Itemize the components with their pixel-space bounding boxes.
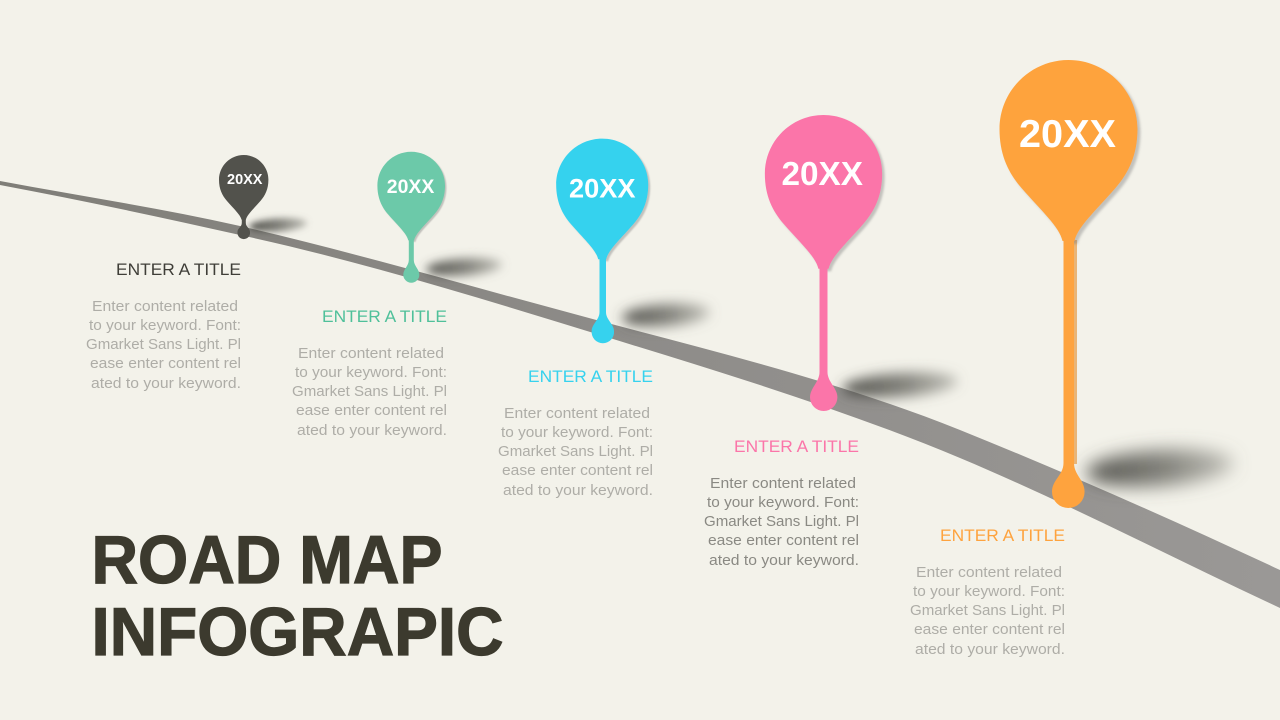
- title: [92, 522, 504, 670]
- block 3 body: ease enter content rel: [502, 462, 653, 479]
- block 3 heading: ENTER A TITLE: [528, 367, 653, 386]
- pin 1 head: [219, 155, 268, 220]
- text block 1: [86, 260, 241, 392]
- text block 2: [292, 307, 447, 439]
- block 3 body: Enter content related: [504, 405, 650, 422]
- pin 4 stem and foot: [810, 262, 837, 411]
- block 5 body: ated to your keyword.: [915, 641, 1065, 658]
- block 4 body: Gmarket Sans Light. Pl: [704, 513, 859, 530]
- block 4 body: Enter content related: [710, 475, 856, 492]
- pin 2 year: 20XX: [387, 177, 435, 198]
- block 2 body: to your keyword. Font:: [295, 364, 447, 381]
- pin 5 head: [1000, 60, 1138, 241]
- pin 2: [377, 152, 503, 283]
- block 1 body: to your keyword. Font:: [89, 317, 241, 334]
- pin 1: [219, 155, 307, 239]
- pin 3 ground shadow: [621, 301, 711, 329]
- pin 4 year: 20XX: [782, 155, 863, 192]
- road: [0, 181, 1280, 608]
- block 4 body: [704, 475, 859, 569]
- pin 3 head: [556, 139, 648, 259]
- block 1 body: Enter content related: [92, 298, 238, 315]
- block 1 body: ated to your keyword.: [91, 375, 241, 392]
- block 3 body: Gmarket Sans Light. Pl: [498, 443, 653, 460]
- pin 3 stem and foot: [592, 255, 614, 343]
- block 1 body: ease enter content rel: [90, 355, 241, 372]
- title: INFOGRAPIC: [92, 594, 504, 670]
- block 5 heading: ENTER A TITLE: [940, 526, 1065, 545]
- text block 3: [498, 367, 653, 499]
- pin 5: [1000, 60, 1235, 508]
- block 1 body: Gmarket Sans Light. Pl: [86, 336, 241, 353]
- block 2 body: ease enter content rel: [296, 402, 447, 419]
- pin 4 ground shadow: [841, 369, 959, 401]
- pin 4 head: [765, 115, 882, 269]
- title: ROAD MAP: [92, 522, 442, 598]
- text block 4: [704, 437, 859, 569]
- block 2 body: [292, 345, 447, 439]
- pin 5 stem and foot: [1052, 232, 1085, 508]
- block 4 body: ease enter content rel: [708, 532, 859, 549]
- pin 5 ground shadow: [1085, 445, 1235, 491]
- block 4 heading: ENTER A TITLE: [734, 437, 859, 456]
- block 2 heading: ENTER A TITLE: [322, 307, 447, 326]
- block 3 body: ated to your keyword.: [503, 482, 653, 499]
- block 5 body: ease enter content rel: [914, 621, 1065, 638]
- pin 5 year: 20XX: [1019, 113, 1116, 156]
- block 4 body: ated to your keyword.: [709, 552, 859, 569]
- pin 4: [765, 115, 959, 411]
- pin 3: [556, 139, 711, 343]
- text block 5: [910, 526, 1065, 658]
- block 3 body: [498, 405, 653, 499]
- block 2 body: Enter content related: [298, 345, 444, 362]
- block 5 body: to your keyword. Font:: [913, 583, 1065, 600]
- pin 1 stem and foot: [237, 215, 250, 239]
- pin 2 stem and foot: [403, 235, 419, 283]
- pin 1 year: 20XX: [227, 172, 263, 188]
- block 4 body: to your keyword. Font:: [707, 494, 859, 511]
- block 5 body: Enter content related: [916, 564, 1062, 581]
- block 3 body: to your keyword. Font:: [501, 424, 653, 441]
- block 2 body: Gmarket Sans Light. Pl: [292, 383, 447, 400]
- block 2 body: ated to your keyword.: [297, 422, 447, 439]
- pin 3 year: 20XX: [569, 174, 636, 204]
- pin 5 stem glow: [1073, 240, 1077, 464]
- block 1 heading: ENTER A TITLE: [116, 260, 241, 279]
- block 5 body: Gmarket Sans Light. Pl: [910, 602, 1065, 619]
- pin 1 ground shadow: [249, 216, 307, 234]
- block 5 body: [910, 564, 1065, 658]
- pin 2 head: [377, 152, 445, 240]
- pin 2 ground shadow: [425, 256, 503, 278]
- block 1 body: [86, 298, 241, 392]
